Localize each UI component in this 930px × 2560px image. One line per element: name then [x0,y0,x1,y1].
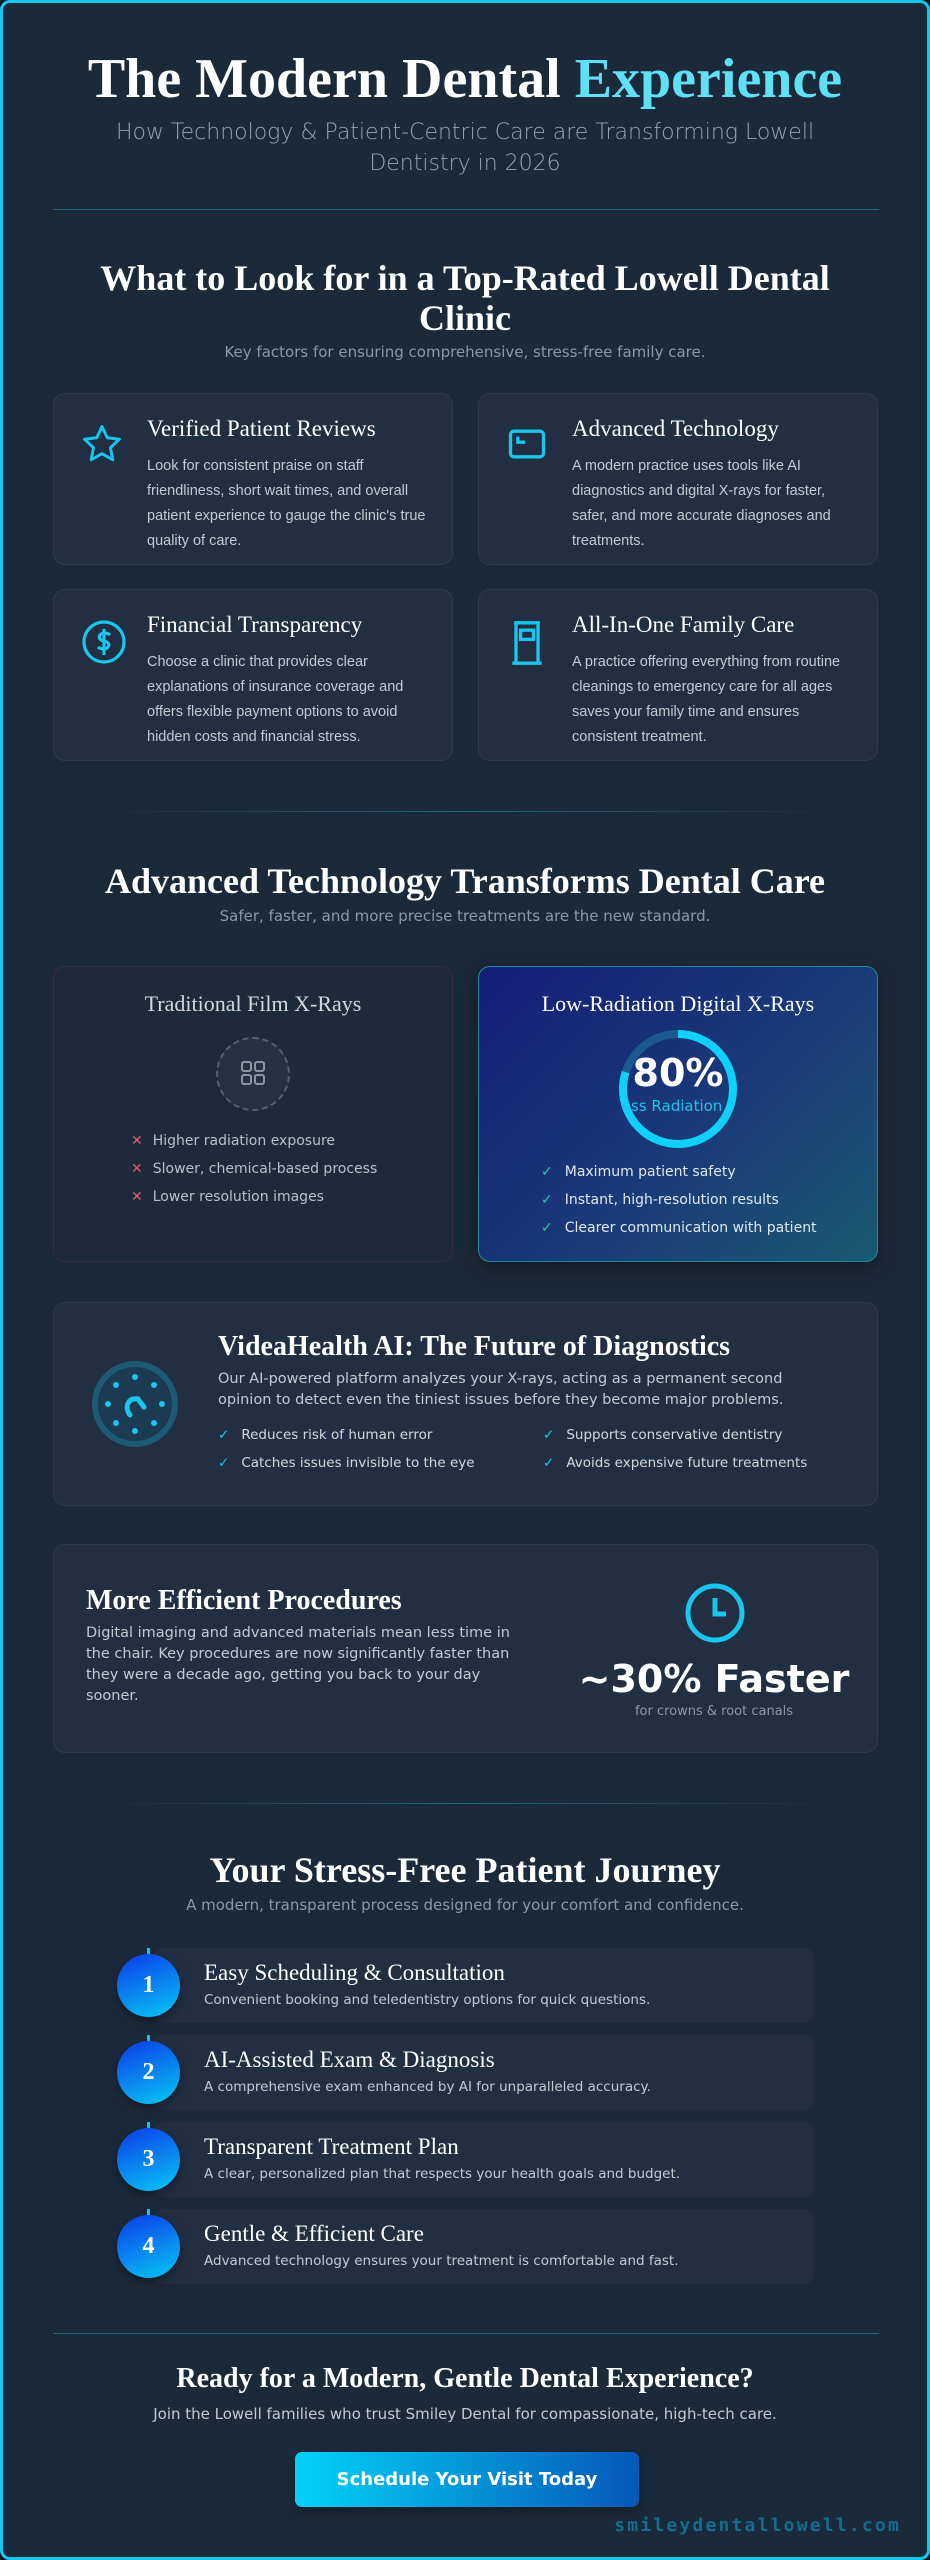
heading: patient journey: Your Stress-Free Patient Journey [210,1850,720,1890]
timeline line [147,1948,150,2285]
panel: traditional x-rays [53,966,453,1262]
step 2: A comprehensive exam enhanced by AI for unparalleled accuracy. [204,2079,651,2095]
title: The Modern Dental Experience [88,48,842,110]
text: 1 [142,1972,154,1998]
list: drawbacks: ✕ Slower, chemical-based process [131,1161,377,1177]
icon: clock [686,1584,744,1642]
panel: digital x-rays [478,966,878,1262]
card: financial [53,589,453,761]
panel: VideaHealth AI [53,1302,878,1506]
card: technology: A modern practice uses tools like AI diagnostics and digital X-rays for faster, safer, and more accurate diagnoses and treatments. [572,458,831,549]
subtitle: How Technology & Patient-Centric Care are Transforming Lowell Dentistry in 2026 [116,120,814,176]
card: reviews: Verified Patient Reviews [147,416,376,441]
icon: AI dial [92,1361,178,1447]
icon: dollar [82,620,126,664]
list: AI benefits [218,1427,807,1471]
card: family care: All-In-One Family Care [572,612,794,637]
text: 4 [142,2233,154,2259]
heading: what to look for: Clinic [419,298,511,338]
panel: VideaHealth AI: ✓ Reduces risk of human error [218,1427,432,1443]
step 2: AI-Assisted Exam & Diagnosis [204,2047,495,2072]
subheading: A modern, transparent process designed for your comfort and confidence. [186,1896,744,1914]
list: benefits: ✓ Clearer communication with patient [541,1220,817,1236]
list: benefits: ✓ Instant, high-resolution results [541,1192,779,1208]
heading: More Efficient Procedures [86,1585,402,1616]
list: drawbacks: ✕ Higher radiation exposure [131,1133,335,1149]
heading: Low-Radiation Digital X-Rays [542,991,814,1016]
button: Schedule Your Visit Today [337,2469,597,2490]
heading: what to look for [100,258,830,338]
step 3: A clear, personalized plan that respects your health goals and budget. [204,2166,680,2182]
subheading: Safer, faster, and more precise treatments are the new standard. [220,907,710,925]
step 2 [153,2035,814,2110]
step 1: Convenient booking and teledentistry options for quick questions. [204,1992,650,2008]
card: technology [478,393,878,565]
panel: VideaHealth AI: ✓ Catches issues invisible to the eye [218,1455,475,1471]
subheading: Key factors for ensuring comprehensive, stress-free family care. [224,343,706,361]
card: financial: Choose a clinic that provides clear explanations of insurance coverage and offers flexible payment options to avoid hidden costs and financial stress. [147,654,403,745]
icon: monitor [508,430,546,458]
stat: ~30% Faster [579,1657,849,1701]
icon: star [83,425,121,462]
panel: efficient procedures [53,1544,878,1753]
heading: advanced technology: Advanced Technology Transforms Dental Care [105,861,825,901]
step 4: Gentle & Efficient Care [204,2221,424,2246]
chart: 80% ring: 80% [633,1051,723,1095]
step 3: Transparent Treatment Plan [204,2134,459,2159]
button [295,2452,639,2507]
card: family care [478,589,878,761]
stat caption: for crowns & root canals [635,1704,793,1719]
card: financial: Financial Transparency [147,612,362,637]
card: family care: A practice offering everything from routine cleanings to emergency care for all ages saves your family time and ensures consistent treatment. [572,654,840,745]
CTA text: Join the Lowell families who trust Smiley Dental for compassionate, high-tech care. [153,2405,777,2423]
step 1 [153,1948,814,2023]
text: 2 [142,2059,154,2085]
icon: building [512,621,542,665]
list: drawbacks [131,1133,377,1205]
card: reviews [53,393,453,565]
icon: film grid [216,1037,290,1111]
CTA heading: Ready for a Modern, Gentle Dental Experience? [176,2363,754,2394]
text: 3 [142,2146,154,2172]
description: Our AI-powered platform analyzes your X-rays, acting as a permanent second opinion to detect even the tiniest issues before they become major problems. [218,1371,783,1408]
heading: VideaHealth AI: The Future of Diagnostics [218,1331,730,1362]
step 4: Advanced technology ensures your treatment is comfortable and fast. [204,2253,679,2269]
list: benefits [541,1164,817,1236]
footer url: smileydentallowell.com [614,2515,901,2536]
list: benefits: ✓ Maximum patient safety [541,1164,736,1180]
description: Digital imaging and advanced materials mean less time in the chair. Key procedures are now significantly faster than they were a decade ago, getting you back to your day sooner. [86,1625,510,1704]
panel: VideaHealth AI: ✓ Avoids expensive future treatments [543,1455,807,1471]
card: technology: Advanced Technology [572,416,779,441]
list: drawbacks: ✕ Lower resolution images [131,1189,324,1205]
card: reviews: Look for consistent praise on staff friendliness, short wait times, and overall patient experience to gauge the clinic's true quality of care. [147,458,425,549]
step 3 [153,2122,814,2197]
step 1: Easy Scheduling & Consultation [204,1960,505,1985]
step 4 [153,2209,814,2284]
heading: what to look for: What to Look for in a Top-Rated Lowell Dental [100,258,830,298]
heading: Traditional Film X-Rays [145,991,361,1016]
chart: 80% ring [619,1030,737,1148]
panel: VideaHealth AI: ✓ Supports conservative dentistry [543,1427,782,1443]
